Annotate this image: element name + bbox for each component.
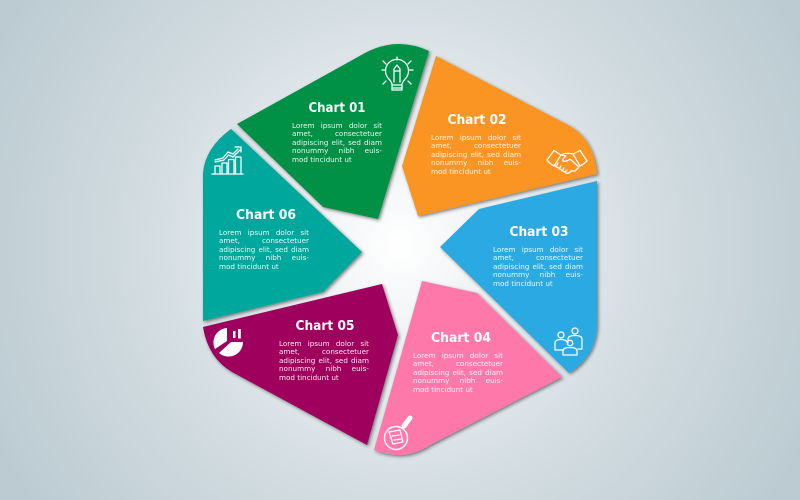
icon: pie chart [213,328,243,357]
text: chart 06 body [219,229,311,273]
text: chart 04 body: mod tincidunt ut [413,385,473,394]
text: chart 02 body: adipiscing elit, sed diam [431,150,521,159]
text: chart 02 body: mod tincidunt ut [431,167,491,176]
text: chart 05 body: adipiscing elit, sed diam [279,356,369,365]
text: chart 01 body: nonummy nibh euis- [292,146,382,155]
panel: chart 03 [440,181,597,373]
text: chart 05 body: nonummy nibh euis- [279,364,369,373]
text: chart 02 body [431,134,523,178]
heading: chart 05: Chart 05 [296,319,354,334]
panel: chart 01 [237,44,429,219]
text: chart 05 body [279,340,371,384]
text: chart 02 body: amet, consectetuer [431,141,521,150]
icon: magnifier [384,418,410,450]
heading: chart 04: Chart 04 [431,331,491,346]
text: chart 06 body: nonummy nibh euis- [219,253,309,262]
heading: chart 01: Chart 01 [308,101,366,116]
text: chart 03 body: amet, consectetuer [493,253,583,262]
text: chart 06 body: amet, consectetuer [219,236,309,245]
panel: chart 06 [203,129,362,321]
text: chart 01 body: amet, consectetuer [292,129,382,138]
panel: chart 04 [374,281,562,455]
panel: chart 02 [402,56,597,216]
heading: chart 06: Chart 06 [236,208,296,223]
heading: chart 02: Chart 02 [448,113,506,128]
text: chart 04 body: amet, consectetuer [413,359,503,368]
icon: handshake [547,150,587,173]
text: chart 02 body: nonummy nibh euis- [431,158,521,167]
text: chart 01 body: adipiscing elit, sed diam [292,138,382,147]
icon: growth bars [212,147,243,174]
text: chart 01 body: mod tincidunt ut [292,155,352,164]
text: chart 03 body: nonummy nibh euis- [493,270,583,279]
heading: chart 03: Chart 03 [510,225,568,240]
text: chart 05 body: mod tincidunt ut [279,373,339,382]
text: chart 05 body: amet, consectetuer [279,347,369,356]
text: chart 01 body [292,122,384,166]
text: chart 04 body: nonummy nibh euis- [413,376,503,385]
icon: people [555,328,582,355]
icon: light bulb with pencil [382,57,413,90]
text: chart 04 body: adipiscing elit, sed diam [413,368,503,377]
text: chart 04 body [413,352,505,396]
text: chart 03 body: mod tincidunt ut [493,279,553,288]
text: chart 03 body [493,246,585,290]
text: chart 03 body: adipiscing elit, sed diam [493,262,583,271]
text: chart 06 body: mod tincidunt ut [219,262,279,271]
panel: chart 05 [203,284,398,445]
text: chart 06 body: adipiscing elit, sed diam [219,245,309,254]
